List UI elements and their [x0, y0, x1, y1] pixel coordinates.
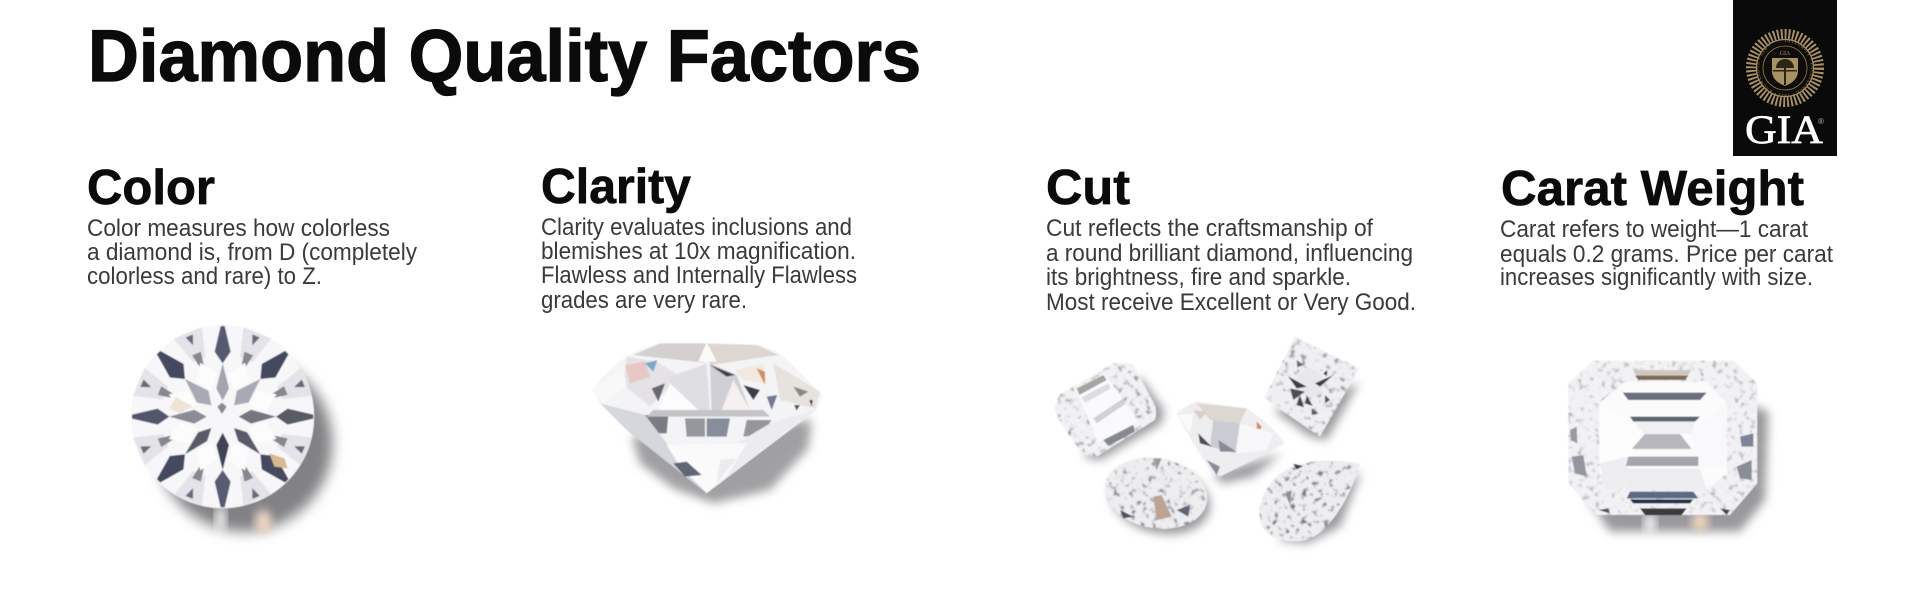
- icon: emerald cut diamond: [1568, 361, 1768, 534]
- text block: clarity: [541, 214, 857, 314]
- logo wordmark: GIA: [1745, 107, 1823, 152]
- diamond shadows: [1083, 377, 1362, 543]
- text block: carat weight: equals 0.2 grams. Price per carat: [1500, 241, 1833, 268]
- panel: cut: [1046, 161, 1416, 543]
- diamond stone: [131, 325, 314, 508]
- panel: clarity: [541, 160, 857, 503]
- text block: clarity: Clarity evaluates inclusions and: [541, 214, 852, 241]
- registered mark: ®: [1818, 117, 1824, 126]
- logo gold seal: GIA: [1780, 51, 1791, 57]
- princess cut stone: [1264, 337, 1359, 437]
- diamond shadow: [156, 355, 332, 534]
- panel: carat weight: [1500, 162, 1833, 534]
- icon: side-view diamond: [593, 342, 823, 503]
- icon: round brilliant diamond: [131, 325, 332, 534]
- GIA logo: [1733, 0, 1837, 156]
- oval cut stone: [1099, 450, 1213, 537]
- logo gold seal: [1746, 29, 1824, 107]
- diamond shadow: [632, 420, 812, 503]
- text block: color: a diamond is, from D (completely: [87, 239, 417, 266]
- text block: cut: its brightness, fire and sparkle.: [1046, 264, 1351, 291]
- text block: cut: Most receive Excellent or Very Good.: [1046, 289, 1416, 316]
- text block: clarity: grades are very rare.: [541, 287, 747, 314]
- text block: color: [87, 215, 417, 290]
- logo gold seal: INTEGRITY • EXCELLENCE • 1931 • KNOWLEDGE • GIA •: [1756, 40, 1813, 96]
- diamond shadow: [1587, 405, 1768, 534]
- text block: cut: Cut reflects the craftsmanship of: [1046, 215, 1373, 242]
- diamond stone: [593, 342, 823, 493]
- heading: carat weight: Carat Weight: [1501, 162, 1804, 216]
- text block: carat weight: Carat refers to weight—1 carat: [1500, 216, 1808, 243]
- text block: color: Color measures how colorless: [87, 215, 390, 242]
- heading: clarity: Clarity: [541, 160, 691, 214]
- diamond stone: [1568, 361, 1757, 515]
- text block: carat weight: [1500, 216, 1833, 291]
- text block: carat weight: increases significantly with size.: [1500, 264, 1813, 291]
- text block: color: colorless and rare) to Z.: [87, 263, 322, 290]
- heading: color: Color: [87, 161, 215, 215]
- icon: five diamond shapes: [1055, 337, 1362, 543]
- pear cut stone: [1259, 461, 1360, 541]
- text block: cut: [1046, 215, 1416, 316]
- title: Diamond Quality Factors: [88, 16, 921, 97]
- text block: clarity: Flawless and Internally Flawless: [541, 262, 857, 289]
- text block: cut: a round brilliant diamond, influencing: [1046, 240, 1413, 267]
- heading: cut: Cut: [1046, 161, 1130, 215]
- text block: clarity: blemishes at 10x magnification.: [541, 238, 856, 265]
- emerald cut stone: [1055, 363, 1156, 457]
- center round stone: [1177, 402, 1285, 477]
- logo background panel: [1733, 0, 1837, 156]
- panel: color: [87, 161, 417, 534]
